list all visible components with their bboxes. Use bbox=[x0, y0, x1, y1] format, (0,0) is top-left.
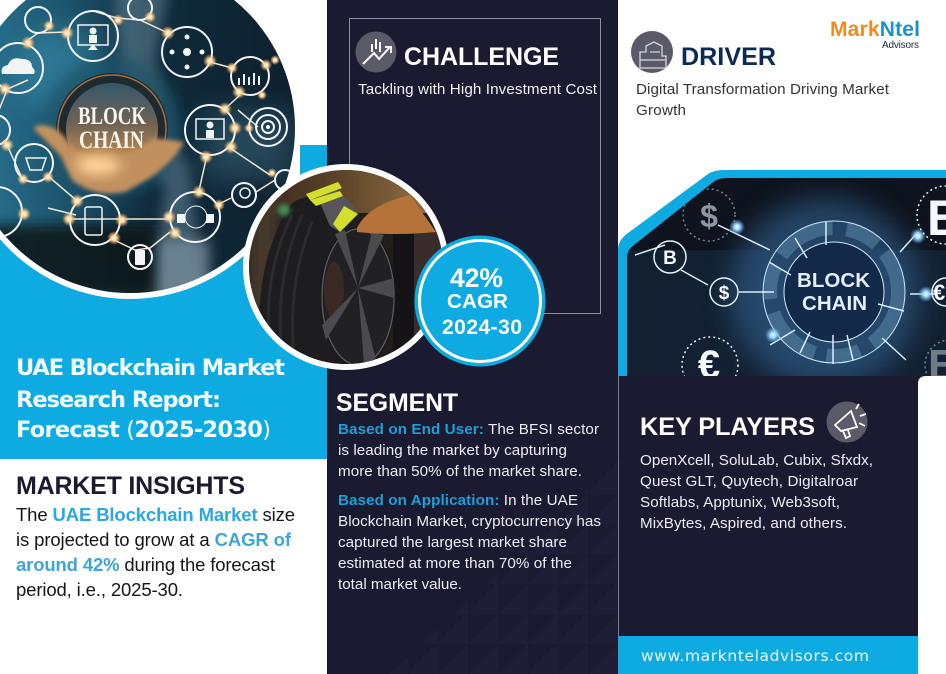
image: blockchain hand circle bbox=[0, 0, 301, 300]
panel: blockchain image with chamfered frame: € bbox=[933, 280, 945, 305]
panel: blockchain image with chamfered frame: € bbox=[698, 343, 720, 387]
driver text: Digital Transformation Driving Market bbox=[636, 81, 890, 98]
segment text: Blockchain Market, cryptocurrency has bbox=[338, 513, 601, 530]
logo: MarkNtel Advisors: Advisors bbox=[882, 40, 919, 51]
segment text: more than 50% of the market share. bbox=[338, 463, 582, 480]
challenge icon bbox=[356, 32, 396, 72]
blockchain image label bbox=[797, 269, 870, 315]
market insights text bbox=[16, 504, 295, 600]
coins bbox=[654, 186, 946, 393]
key players heading: KEY PLAYERS bbox=[640, 413, 815, 441]
hand bbox=[33, 125, 184, 194]
CAGR badge: CAGR bbox=[447, 290, 508, 313]
CAGR badge: 2024-30 bbox=[442, 316, 522, 339]
small network icons bbox=[2, 25, 280, 265]
segment text: captured the largest market share bbox=[338, 534, 567, 551]
key players text: OpenXcell, SoluLab, Cubix, Sfxdx, bbox=[640, 452, 873, 469]
CAGR badge: 42% bbox=[450, 263, 503, 293]
driver text bbox=[636, 81, 890, 119]
driver text: Growth bbox=[636, 102, 686, 119]
market insights text: period, i.e., 2025-30. bbox=[16, 579, 183, 600]
segment text: Based on End User: The BFSI sector bbox=[338, 421, 599, 438]
key players text: Quest GLT, Quytech, Digitalroar bbox=[640, 473, 858, 490]
megaphone icon bbox=[826, 402, 868, 442]
challenge outline box bbox=[350, 18, 600, 314]
blockchain label: CHAIN bbox=[79, 127, 144, 154]
panel: blockchain image with chamfered frame: B bbox=[663, 248, 677, 269]
title: Research Report: bbox=[16, 387, 221, 413]
blockchain label: BLOCK bbox=[78, 103, 146, 130]
panel: left blue title block bbox=[0, 145, 327, 459]
driver icon bbox=[631, 31, 673, 73]
logo: MarkNtel Advisors bbox=[830, 18, 920, 51]
market insights text: around 42% during the forecast bbox=[16, 554, 275, 575]
segment text: total market value. bbox=[338, 576, 462, 593]
title: UAE Blockchain Market bbox=[16, 355, 285, 381]
website footer bar bbox=[618, 636, 918, 674]
panel: blockchain image with chamfered frame: $ bbox=[719, 283, 730, 304]
key players text: MixBytes, Aspired, and others. bbox=[640, 515, 847, 532]
glowing nodes bbox=[0, 11, 280, 245]
segment text: estimated at more than 70% of the bbox=[338, 555, 572, 572]
panel: blockchain image with chamfered frame bbox=[618, 170, 946, 393]
segment text bbox=[338, 421, 601, 593]
arm bbox=[357, 195, 436, 234]
segment text: Based on Application: In the UAE bbox=[338, 492, 578, 509]
image: tyre circle bbox=[243, 164, 450, 370]
segment heading: SEGMENT bbox=[336, 390, 458, 417]
blockchain label bbox=[78, 103, 146, 154]
challenge heading: CHALLENGE bbox=[404, 43, 559, 71]
market insights text: is projected to grow at a CAGR of bbox=[16, 529, 292, 550]
title: Forecast (2025-2030) bbox=[16, 417, 271, 443]
panel: dark centre column bbox=[327, 0, 618, 674]
blockchain image label: BLOCK bbox=[797, 269, 870, 292]
website footer bar: www.marknteladvisors.com bbox=[641, 647, 869, 665]
network lines bbox=[0, 11, 275, 250]
glove bbox=[318, 186, 358, 232]
CAGR badge bbox=[414, 236, 546, 366]
title bbox=[16, 355, 285, 443]
segment text: is leading the market by capturing bbox=[338, 442, 567, 459]
key players text bbox=[640, 452, 873, 532]
challenge text: Tackling with High Investment Cost bbox=[358, 81, 598, 98]
blockchain image label: CHAIN bbox=[802, 292, 867, 315]
panel: key players bbox=[618, 376, 946, 674]
logo: MarkNtel Advisors: MarkNtel bbox=[830, 18, 920, 41]
market insights heading: MARKET INSIGHTS bbox=[16, 472, 245, 500]
driver heading: DRIVER bbox=[681, 43, 776, 71]
key players text: Softlabs, Apptunix, Web3soft, bbox=[640, 494, 840, 511]
panel: blockchain image with chamfered frame: $ bbox=[700, 198, 718, 234]
market insights text: The UAE Blockchain Market size bbox=[16, 504, 295, 525]
